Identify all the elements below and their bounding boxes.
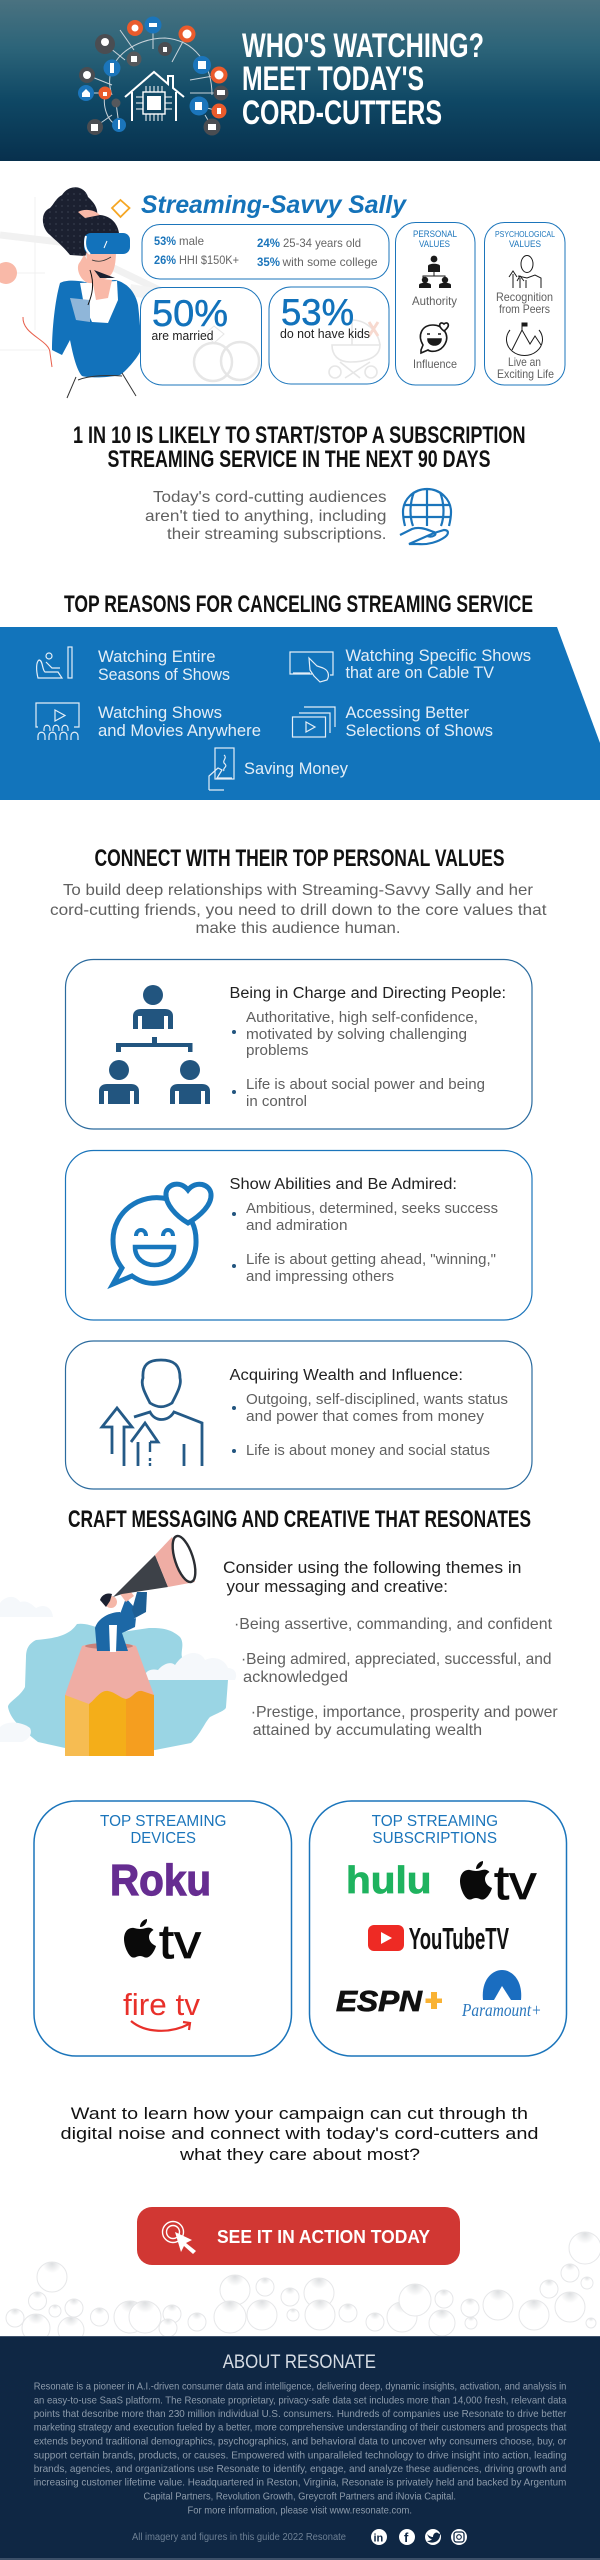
panel: top streaming devices bbox=[34, 1801, 292, 2056]
reason: saving money: Saving Money bbox=[244, 760, 349, 778]
panel: demographics: with some college bbox=[282, 255, 378, 269]
panel: being in charge: Life is about social power and being bbox=[246, 1077, 485, 1093]
panel: demographics: HHI $150K+ bbox=[179, 253, 239, 267]
panel: psychological values: PSYCHOLOGICAL bbox=[495, 230, 556, 239]
logo: YouTube TV bbox=[368, 1921, 509, 1956]
panel: top streaming subscriptions: TOP STREAMING bbox=[372, 1813, 498, 1830]
panel: personal values: PERSONAL bbox=[413, 229, 457, 239]
panel: acquiring wealth bbox=[66, 1341, 532, 1489]
panel: show abilities bbox=[66, 1150, 532, 1320]
logo: Paramount+ bbox=[461, 1970, 542, 2020]
footer text: increasing customer lifetime value. Headquartered in Reston, Virginia, Resonate is privately held and backed by Argentum bbox=[34, 2478, 566, 2489]
reason: entire seasons: Seasons of Shows bbox=[98, 666, 230, 684]
panel: demographics: 35% bbox=[257, 255, 280, 269]
footer text: an easy-to-use SaaS platform. The Resonate proprietary, privacy-safe data set includes more than 14,000 fresh, relevant data bbox=[34, 2395, 567, 2406]
icon: orange diamond bbox=[112, 200, 130, 217]
reason: better selections bbox=[292, 704, 493, 740]
logo: Apple TV: tv bbox=[159, 1916, 201, 1969]
text block: audience intro: Today's cord-cutting audiences bbox=[153, 489, 386, 506]
text block: themes: attained by accumulating wealth bbox=[253, 1722, 482, 1739]
person bbox=[95, 1588, 147, 1652]
panel: top streaming devices: TOP STREAMING bbox=[100, 1813, 226, 1830]
panel: personal values: Authority bbox=[412, 294, 457, 308]
logo: Paramount+: Paramount+ bbox=[461, 2000, 542, 2020]
panel: married stat bbox=[140, 288, 262, 385]
text block: call to action question bbox=[60, 2104, 538, 2164]
icon: authority hierarchy bbox=[419, 256, 451, 288]
reason: anywhere bbox=[36, 703, 261, 740]
logo: YouTube TV: YouTubeTV bbox=[409, 1921, 509, 1956]
panel: psychological values bbox=[484, 222, 565, 385]
title: CORD-CUTTERS bbox=[242, 94, 442, 132]
panel: being in charge: motivated by solving challenging bbox=[246, 1027, 467, 1043]
panel: show abilities: and admiration bbox=[246, 1218, 348, 1234]
logo: Roku: Roku bbox=[110, 1856, 211, 1905]
panel: being in charge: Being in Charge and Directing People: bbox=[230, 985, 506, 1002]
panel: show abilities: Show Abilities and Be Admired: bbox=[230, 1176, 457, 1193]
icon: exciting life mountain bbox=[507, 323, 542, 355]
button: see it in action bbox=[137, 2207, 460, 2265]
panel: demographics: 24% bbox=[257, 236, 280, 250]
logo: Apple TV bbox=[124, 1916, 201, 1969]
panel: being in charge: Authoritative, high self-confidence, bbox=[246, 1010, 478, 1026]
footer text: points that describe more than 230 million individual U.S. consumers. Hundreds of companies use Resonate to drive better bbox=[34, 2409, 567, 2420]
text block: call to action question: digital noise and connect with today's cord-cutters and bbox=[60, 2124, 538, 2143]
reason: specific shows: that are on Cable TV bbox=[346, 664, 494, 682]
panel: personal values: VALUES bbox=[419, 239, 450, 249]
icon: recognition man and arrows bbox=[509, 256, 541, 288]
logo: ESPN+: ESPN bbox=[336, 1986, 423, 2018]
panel: reasons banner bbox=[0, 627, 600, 800]
panel: married stat: 50% bbox=[152, 293, 228, 334]
footer text: extends beyond traditional demographics, psychographics, and behavioral data to uncover why consumers choose, buy, or bbox=[34, 2436, 567, 2447]
social icons bbox=[371, 2529, 467, 2545]
reason: entire seasons: Watching Entire bbox=[98, 648, 216, 666]
illustration: woman with VR headset bbox=[0, 187, 260, 398]
icon: man with rising arrows bbox=[102, 1360, 202, 1466]
reason: saving money bbox=[209, 748, 349, 790]
text block: call to action question: what they care about most? bbox=[179, 2145, 420, 2164]
panel: acquiring wealth: and power that comes from money bbox=[246, 1409, 485, 1425]
social icons: f bbox=[404, 2530, 409, 2545]
text block: themes: Consider using the following themes in bbox=[223, 1559, 522, 1577]
title: WHO'S WATCHING? bbox=[242, 27, 484, 65]
icon: click cursor bbox=[162, 2222, 196, 2254]
reason: better selections: Accessing Better bbox=[346, 704, 469, 722]
text block: audience intro bbox=[145, 489, 386, 543]
panel: married stat: are married bbox=[152, 328, 214, 343]
icon: admired smile bbox=[113, 1184, 211, 1284]
persona title: Streaming-Savvy Sally bbox=[141, 191, 407, 219]
title bbox=[242, 27, 484, 132]
reason: specific shows bbox=[290, 647, 531, 682]
panel: psychological values: Recognition bbox=[496, 290, 553, 304]
footer text: marketing strategy and execution fueled by a better, more comprehensive understanding of their customers and prospects that bbox=[34, 2423, 567, 2434]
panel: no kids stat: do not have kids bbox=[280, 326, 370, 341]
panel: show abilities: Ambitious, determined, seeks success bbox=[246, 1201, 498, 1217]
social icons: in bbox=[374, 2532, 384, 2544]
panel: top streaming subscriptions bbox=[310, 1801, 566, 2056]
text block: connect intro: make this audience human. bbox=[196, 920, 400, 937]
panel: being in charge bbox=[66, 960, 532, 1129]
logo: Fire TV: fire tv bbox=[123, 1987, 201, 2022]
footer panel bbox=[0, 2336, 600, 2560]
panel: acquiring wealth: Outgoing, self-disciplined, wants status bbox=[246, 1392, 508, 1408]
panel: demographics: 53% bbox=[154, 234, 176, 248]
panel: no kids stat: 53% bbox=[281, 292, 354, 333]
icon: globe in hand bbox=[400, 489, 451, 544]
panel: demographics: male bbox=[179, 234, 204, 248]
decorative bubbles bbox=[6, 2232, 600, 2343]
heading: 1 in 10 bbox=[73, 422, 526, 473]
reason: entire seasons bbox=[37, 647, 230, 684]
panel: psychological values: VALUES bbox=[509, 239, 541, 249]
footer heading: ABOUT RESONATE bbox=[223, 2352, 376, 2373]
panel: personal values bbox=[396, 222, 475, 385]
footer text: brands, agencies, and organizations use Resonate to identify, engage, and analyze these audiences, driving growth and bbox=[34, 2464, 567, 2475]
title: MEET TODAY'S bbox=[242, 60, 424, 98]
copyright: All imagery and figures in this guide 2022 Resonate bbox=[132, 2532, 346, 2543]
icon: smart home network bbox=[78, 16, 228, 136]
reason: better selections: Selections of Shows bbox=[346, 722, 493, 740]
panel: being in charge: problems bbox=[246, 1043, 308, 1059]
panel: psychological values: Live an bbox=[508, 355, 541, 369]
telescope bbox=[113, 1533, 200, 1597]
button: see it in action: SEE IT IN ACTION TODAY bbox=[217, 2227, 430, 2247]
panel: psychological values: Exciting Life bbox=[497, 367, 554, 381]
text block: themes: ·Prestige, importance, prosperity and power bbox=[251, 1704, 558, 1721]
panel: being in charge: in control bbox=[246, 1094, 307, 1110]
text block: themes: ·Being admired, appreciated, successful, and bbox=[241, 1651, 552, 1668]
logo: Hulu: hulu bbox=[346, 1860, 432, 1902]
panel: psychological values: from Peers bbox=[499, 302, 550, 316]
logo: Apple TV: tv bbox=[494, 1857, 536, 1910]
text block: connect intro bbox=[50, 882, 547, 937]
panel: top streaming subscriptions: SUBSCRIPTIONS bbox=[372, 1830, 497, 1847]
panel: acquiring wealth: Acquiring Wealth and Influence: bbox=[230, 1367, 463, 1384]
footer text: Capital Partners, Revolution Growth, Greycroft Partners and iNovia Capital. bbox=[144, 2491, 456, 2502]
text block: audience intro: their streaming subscriptions. bbox=[167, 526, 386, 543]
panel: no kids stat bbox=[269, 287, 389, 384]
text block: themes bbox=[223, 1559, 558, 1739]
text block: call to action question: Want to learn how your campaign can cut through th bbox=[71, 2104, 528, 2123]
text block: themes: ·Being assertive, commanding, and confident bbox=[234, 1616, 553, 1633]
panel: demographics bbox=[142, 224, 389, 279]
panel: demographics: 25-34 years old bbox=[283, 236, 361, 250]
reason: anywhere: Watching Shows bbox=[98, 704, 222, 722]
footer text: For more information, please visit www.resonate.com. bbox=[188, 2505, 412, 2516]
illustration: telescope on pencil bbox=[0, 1533, 236, 1756]
icon: stroller bbox=[329, 320, 380, 378]
icon: wedding rings bbox=[194, 326, 259, 381]
panel: show abilities: and impressing others bbox=[246, 1269, 394, 1285]
panel: demographics: 26% bbox=[154, 253, 176, 267]
panel: top streaming devices: DEVICES bbox=[130, 1830, 196, 1847]
icon: hierarchy bbox=[99, 985, 210, 1104]
text block: audience intro: aren't tied to anything, including bbox=[145, 508, 386, 525]
reason: anywhere: and Movies Anywhere bbox=[98, 722, 261, 740]
panel: personal values: Influence bbox=[413, 357, 457, 371]
panel: acquiring wealth: Life is about money and social status bbox=[246, 1443, 490, 1459]
reason: specific shows: Watching Specific Shows bbox=[346, 647, 531, 665]
footer text: support certain brands, products, or causes. Empowered with unparalleled technology to drive insight into action, leading bbox=[34, 2450, 567, 2461]
footer text bbox=[34, 2381, 567, 2516]
logo: Apple TV bbox=[460, 1857, 536, 1910]
pencil bbox=[65, 1643, 154, 1756]
text block: connect intro: To build deep relationships with Streaming-Savvy Sally and her bbox=[63, 882, 534, 899]
text block: themes: your messaging and creative: bbox=[226, 1578, 448, 1596]
text block: themes: acknowledged bbox=[243, 1669, 348, 1686]
icon: influence smile bbox=[420, 323, 448, 353]
panel: show abilities: Life is about getting ahead, "winning," bbox=[246, 1252, 496, 1268]
header banner bbox=[0, 0, 600, 161]
text block: connect intro: cord-cutting friends, you need to drill down to the core values that bbox=[50, 902, 547, 919]
